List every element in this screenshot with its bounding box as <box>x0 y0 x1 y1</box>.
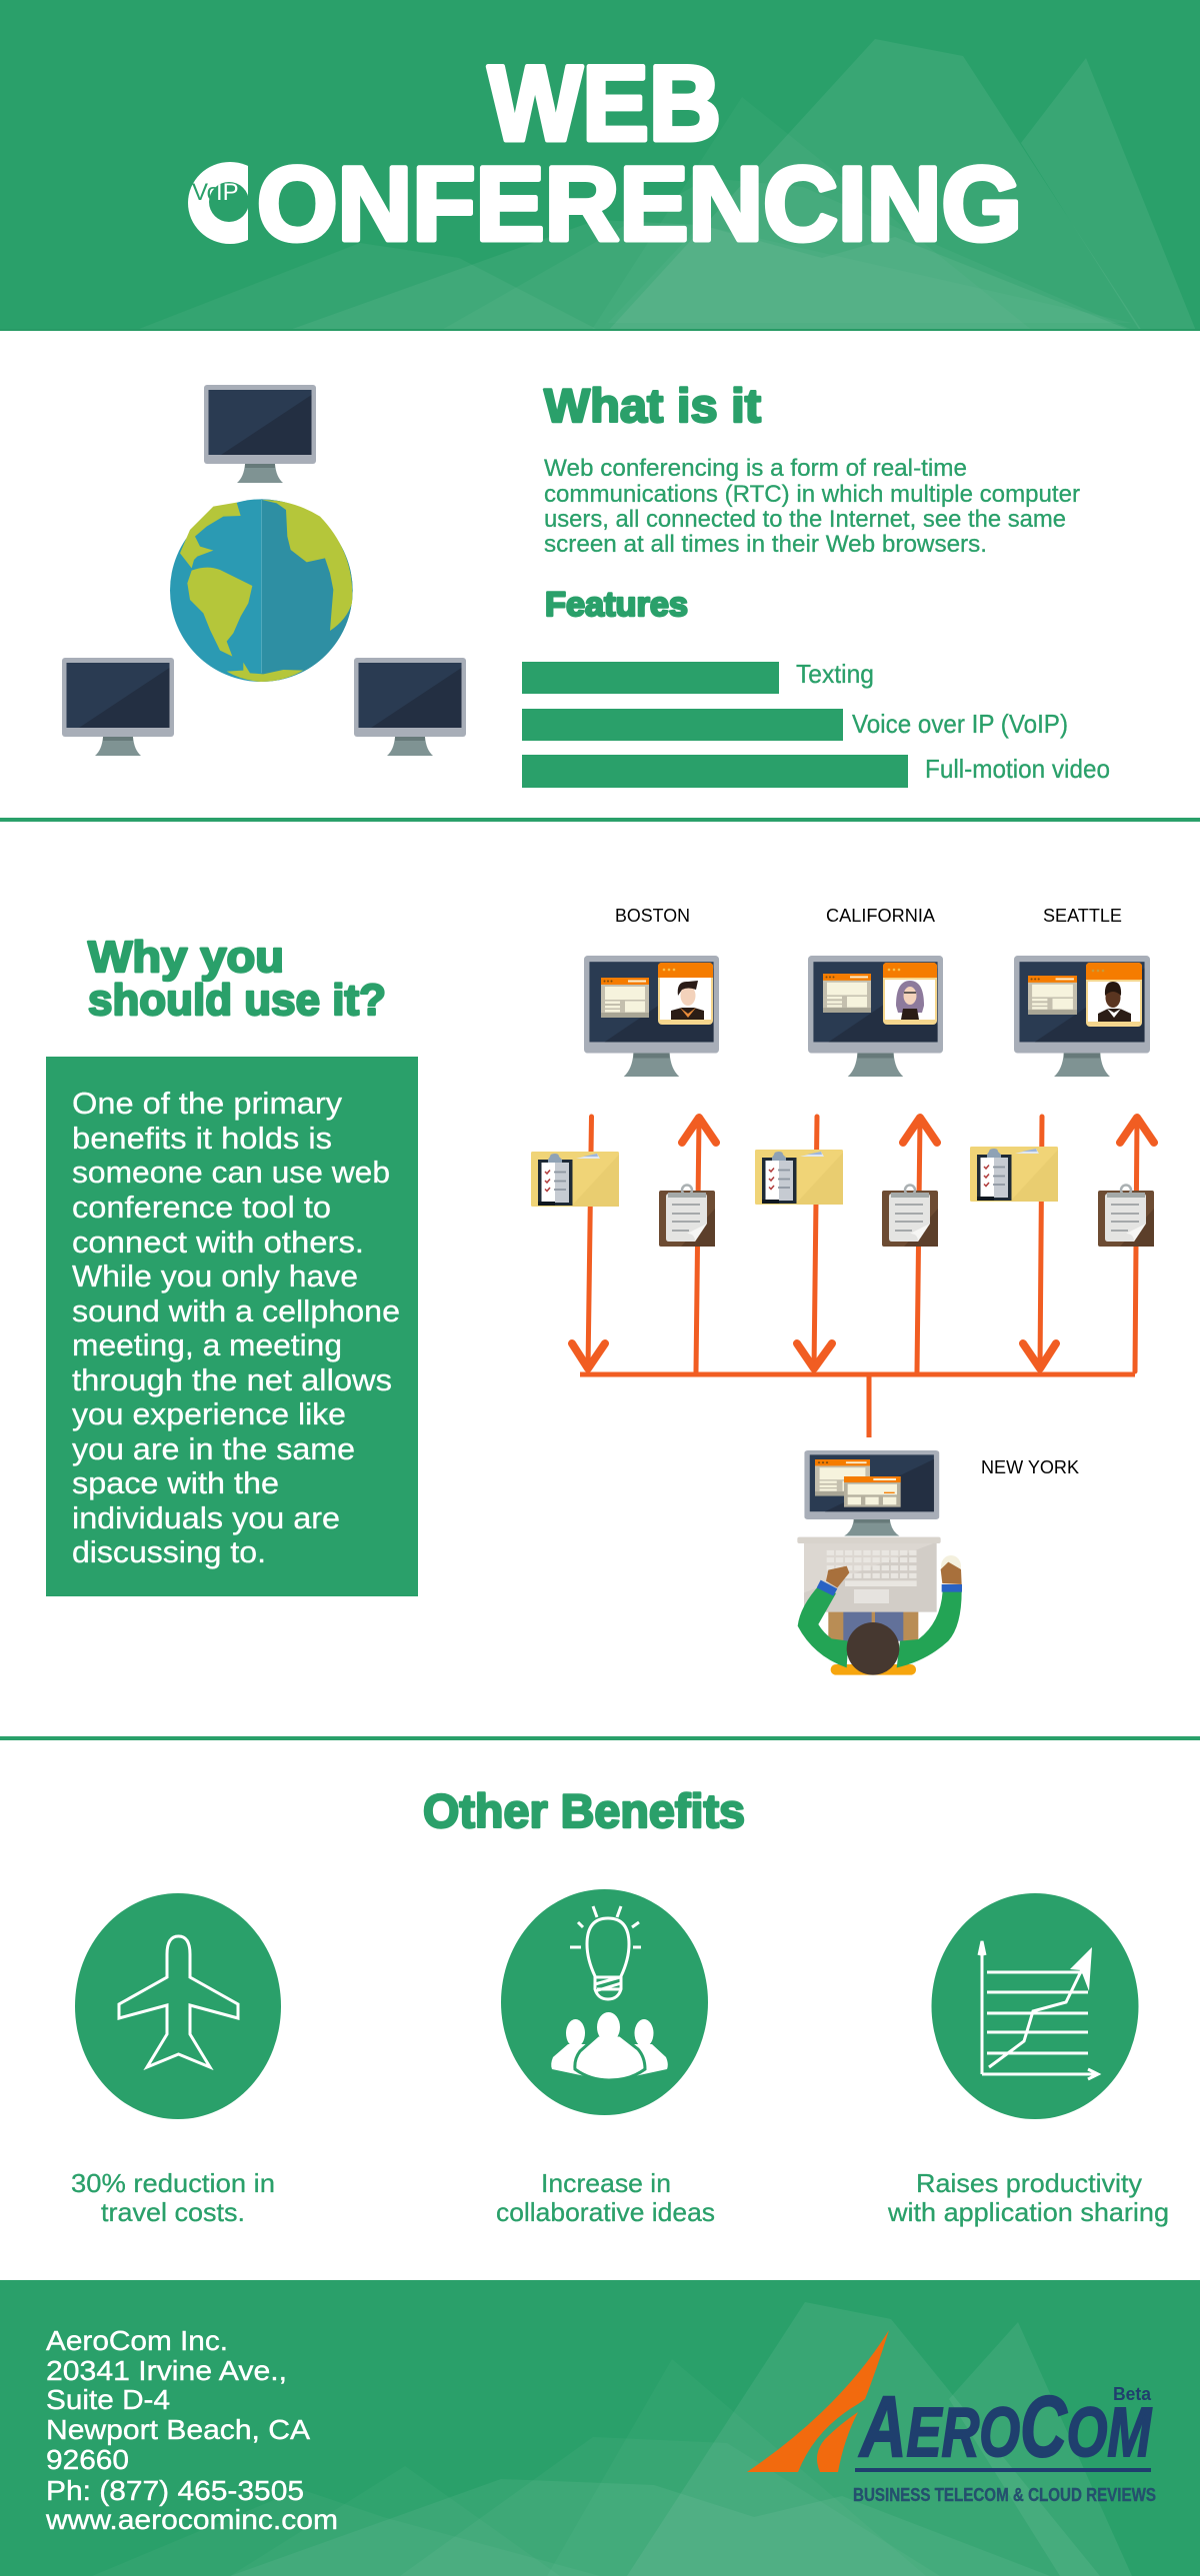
title: C <box>192 146 252 263</box>
heading: Why you should use it <box>88 933 386 1025</box>
icon: right monitor <box>354 658 466 756</box>
panel: why you should use it: you are in the same <box>72 1431 355 1466</box>
heading: Why you should use it: should use it? <box>88 976 386 1025</box>
text block: company address: AeroCom Inc. <box>46 2325 228 2356</box>
panel: why you should use it: One of the primary <box>72 1086 343 1121</box>
heading: Why you should use it: Why you <box>88 933 284 982</box>
icon: airplane <box>75 1893 281 2119</box>
caption: collaborative ideas <box>496 2197 715 2227</box>
panel: why you should use it: you experience like <box>72 1396 346 1431</box>
caption: Increase in <box>541 2168 671 2198</box>
logo: AeroCom <box>747 2330 1156 2505</box>
panel: why you should use it <box>46 1057 418 1596</box>
text block: company address: www.aerocominc.com <box>45 2504 338 2535</box>
icon: left monitor <box>62 658 174 756</box>
label: New York: NEW YORK <box>981 1457 1079 1477</box>
text block: company address: 92660 <box>46 2444 129 2475</box>
label: Boston: BOSTON <box>615 906 690 926</box>
text block: definition: Web conferencing is a form of real-time <box>544 455 967 482</box>
bar chart: features: Texting <box>796 659 874 689</box>
panel: why you should use it: connect with others. <box>72 1225 364 1260</box>
icon: New York user at desk <box>797 1450 962 1675</box>
panel: why you should use it: conference tool to <box>72 1190 331 1225</box>
logo: AeroCom: Beta <box>1113 2384 1152 2404</box>
illustration: globe with three monitors <box>62 385 466 756</box>
icon: light bulb and people <box>501 1889 708 2115</box>
title: Vo <box>192 179 220 206</box>
text block: definition <box>544 455 1080 558</box>
caption: Raises productivity <box>916 2168 1142 2198</box>
heading: Other Benefits: Other Benefits <box>423 1784 745 1837</box>
panel: why you should use it: through the net allows <box>72 1362 392 1397</box>
caption <box>71 2168 275 2227</box>
arrows: connection lines <box>572 1117 1154 1437</box>
footer banner <box>0 2280 1200 2576</box>
icon: orange swoosh <box>747 2330 889 2472</box>
caption <box>496 2168 715 2227</box>
bar chart: features: Voice over IP (VoIP) <box>852 709 1068 739</box>
icon: globe <box>170 499 353 682</box>
text block: company address <box>45 2325 338 2535</box>
icon: Seattle monitor <box>1014 956 1150 1077</box>
bar chart: features: Full-motion video <box>925 754 1110 784</box>
icon: Boston folder <box>531 1152 619 1207</box>
benefit: collaborative ideas <box>496 1889 715 2227</box>
title: WEB <box>488 43 721 163</box>
heading: Features: Features <box>545 586 688 624</box>
icon: Boston monitor <box>584 956 719 1077</box>
text block: definition: communications (RTC) in which multiple computer <box>544 481 1080 508</box>
text block: company address: Suite D-4 <box>46 2384 170 2415</box>
caption <box>887 2168 1169 2227</box>
panel: why you should use it: sound with a cellphone <box>72 1293 400 1328</box>
panel: why you should use it: While you only have <box>72 1259 358 1293</box>
title: IP <box>216 179 239 206</box>
label: Seattle: SEATTLE <box>1043 906 1122 926</box>
title <box>188 64 1018 244</box>
benefit: application sharing <box>887 1893 1169 2227</box>
header banner <box>0 0 1200 331</box>
label: California: CALIFORNIA <box>826 906 935 926</box>
caption: with application sharing <box>887 2197 1169 2227</box>
icon: Seattle clipboard <box>1098 1186 1154 1247</box>
benefit: travel costs <box>71 1893 281 2227</box>
caption: travel costs. <box>101 2197 245 2227</box>
text block: definition: screen at all times in their Web browsers. <box>544 531 987 558</box>
icon: top monitor <box>204 385 316 483</box>
icon: Boston clipboard <box>659 1186 715 1247</box>
title: ONFERENCING <box>257 146 1022 263</box>
text block: definition: users, all connected to the Internet, see the same <box>544 506 1066 533</box>
icon: California folder <box>755 1150 843 1205</box>
panel: why you should use it: space with the <box>72 1465 279 1500</box>
icon: rising chart <box>932 1893 1138 2119</box>
heading: What is it: What is it <box>544 379 761 432</box>
icon: California clipboard <box>882 1186 938 1247</box>
diagram: offices connected to New York <box>531 906 1154 1675</box>
text block: company address: Newport Beach, CA <box>46 2414 310 2445</box>
caption: 30% reduction in <box>71 2168 275 2198</box>
icon: Seattle folder <box>970 1147 1058 1202</box>
panel: why you should use it: someone can use web <box>72 1155 390 1190</box>
text block: company address: Ph: (877) 465-3505 <box>46 2475 304 2506</box>
icon: California monitor <box>808 956 943 1077</box>
text block: company address: 20341 Irvine Ave., <box>46 2355 287 2386</box>
bar chart: features <box>522 659 1110 788</box>
panel: why you should use it: benefits it holds is <box>72 1121 332 1156</box>
panel: why you should use it: individuals you are <box>72 1500 340 1535</box>
logo: AeroCom: AEROCOM <box>859 2379 1152 2475</box>
panel: why you should use it: discussing to. <box>72 1534 266 1569</box>
panel: why you should use it: meeting, a meeting <box>72 1327 342 1362</box>
